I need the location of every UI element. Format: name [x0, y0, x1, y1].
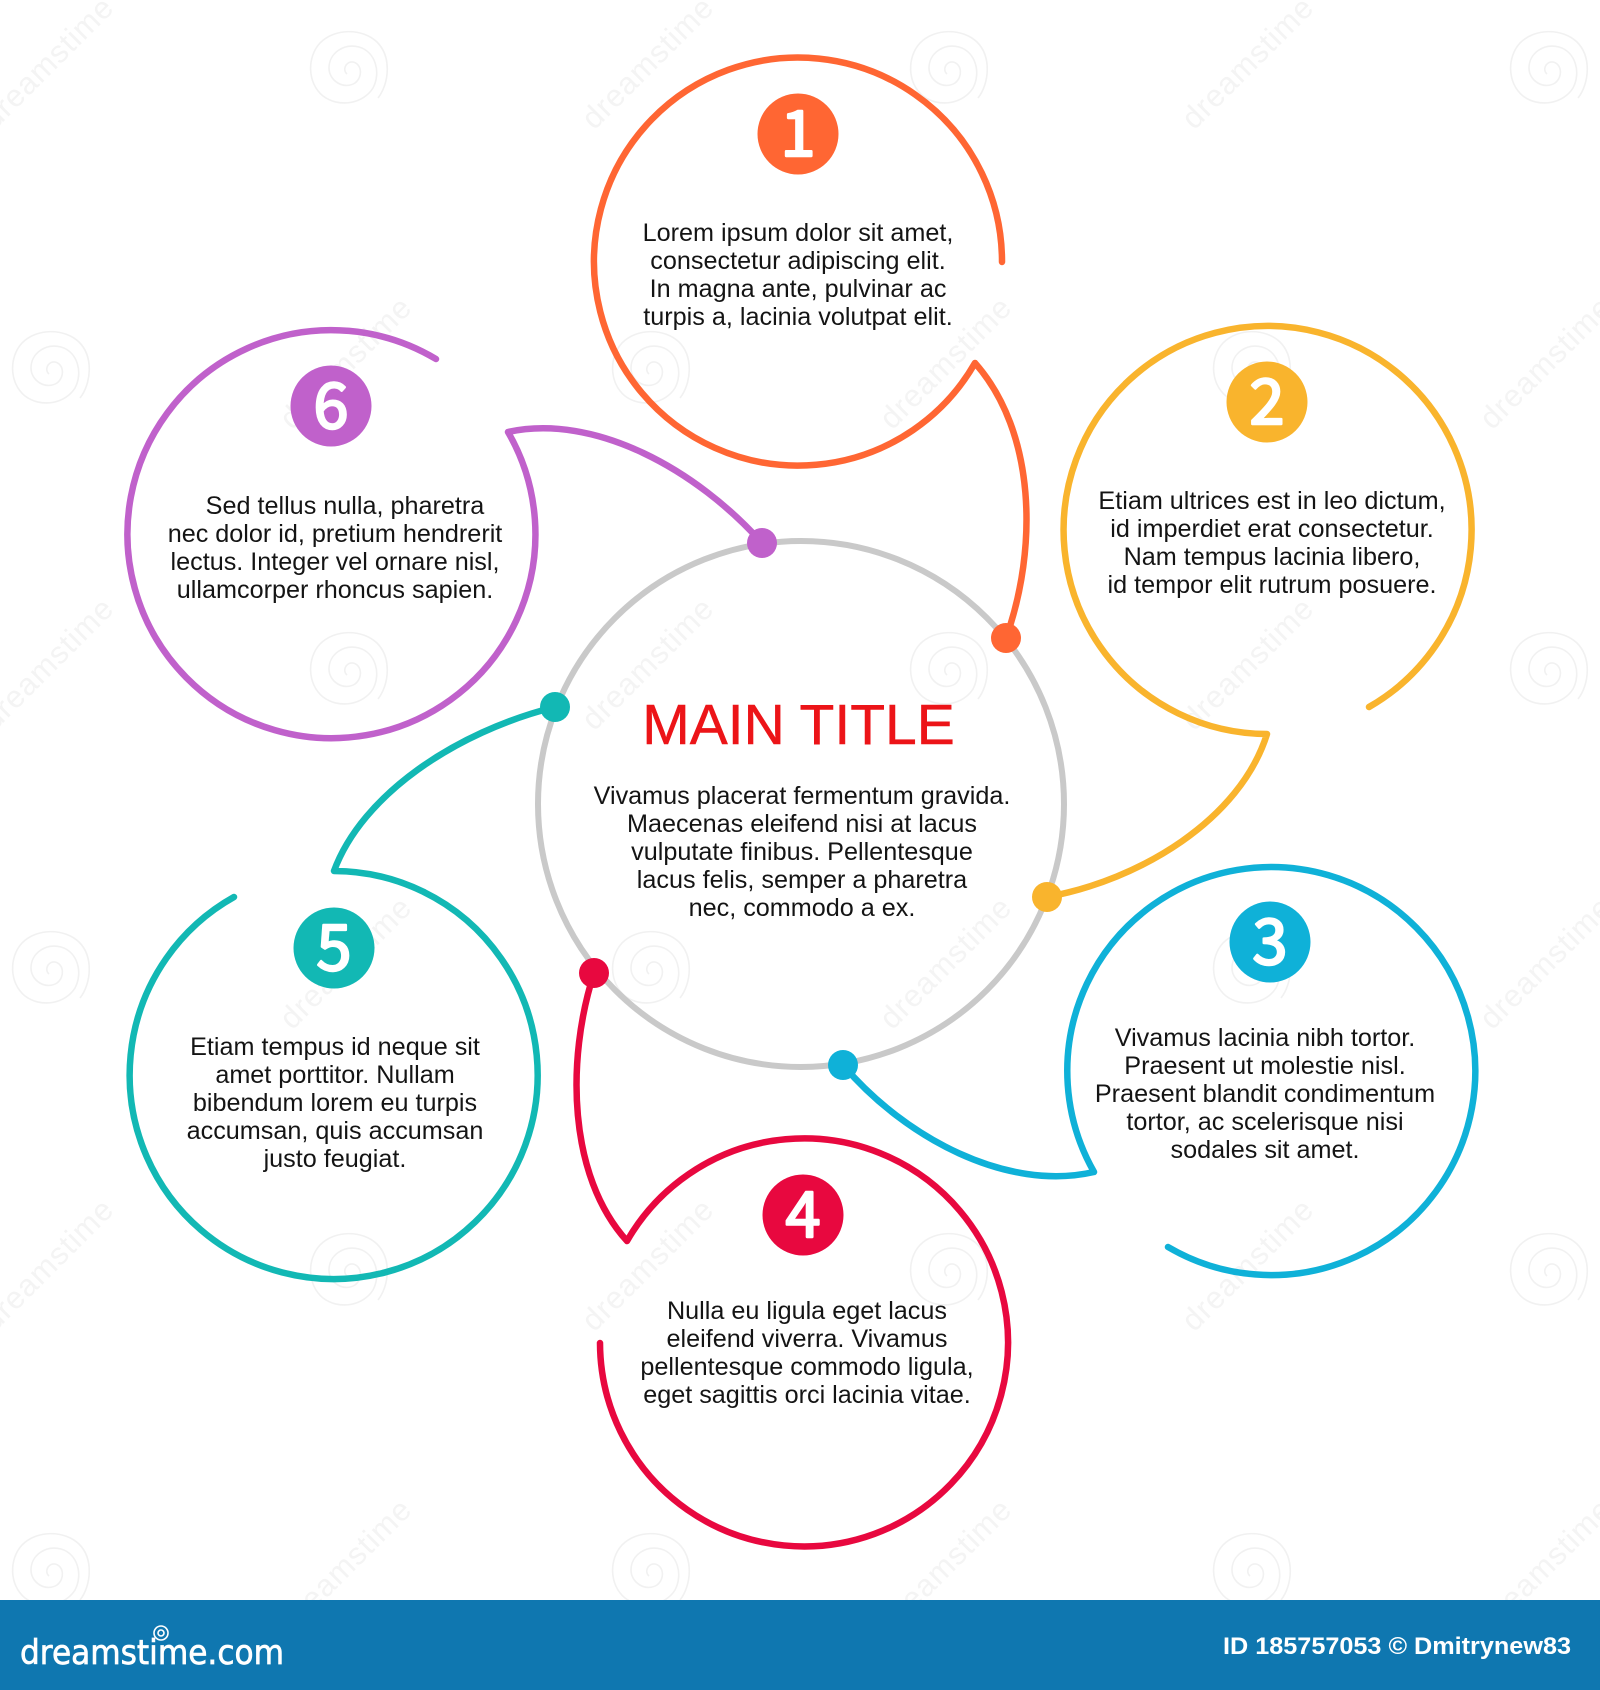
text 6: Sed tellus nulla, pharetra — [206, 492, 485, 520]
step 1 bubble — [594, 58, 1026, 653]
text 1: In magna ante, pulvinar ac — [650, 275, 946, 303]
text 2 — [1098, 487, 1446, 599]
text 1: Lorem ipsum dolor sit amet, — [643, 219, 953, 247]
text 6: nec dolor id, pretium hendrerit — [168, 520, 502, 548]
watermark pattern: dreamstime — [872, 289, 1019, 436]
text 6: ullamcorper rhoncus sapien. — [177, 576, 493, 604]
text 5: justo feugiat. — [263, 1145, 406, 1173]
text 2: Etiam ultrices est in leo dictum, — [1098, 487, 1446, 515]
step 3 bubble — [828, 867, 1475, 1275]
badge 6: 6 — [314, 356, 348, 447]
text 6: lectus. Integer vel ornare nisl, — [170, 548, 500, 576]
central circle panel — [538, 541, 1064, 1067]
badge 1 — [758, 84, 838, 175]
text 3: Praesent blandit condimentum — [1095, 1080, 1435, 1108]
text 3: Praesent ut molestie nisl. — [1124, 1052, 1406, 1080]
badge 6 — [290, 356, 372, 447]
central description: vulputate finibus. Pellentesque — [631, 838, 973, 866]
main title: MAIN TITLE — [642, 693, 955, 757]
badge 2: 2 — [1250, 352, 1284, 443]
step 6 bubble — [127, 330, 777, 738]
text 4: eget sagittis orci lacinia vitae. — [643, 1381, 971, 1409]
step 2 bubble — [1032, 326, 1472, 912]
watermark pattern: dreamstime — [1174, 590, 1321, 737]
step 5 bubble — [130, 692, 570, 1279]
badge 5: 5 — [317, 898, 351, 989]
badge 3 — [1230, 892, 1310, 983]
footer bar — [0, 1600, 1600, 1690]
watermark pattern: dreamstime — [1174, 1191, 1321, 1338]
outline 2 — [1047, 326, 1472, 897]
text 5: Etiam tempus id neque sit — [190, 1033, 480, 1061]
text 5: bibendum lorem eu turpis — [193, 1089, 477, 1117]
text 4: pellentesque commodo ligula, — [640, 1353, 974, 1381]
badge 2 — [1226, 352, 1308, 443]
text 5: amet porttitor. Nullam — [215, 1061, 455, 1089]
badge 5 — [294, 898, 374, 989]
badge 4 — [762, 1165, 844, 1256]
text 5 — [187, 1033, 483, 1173]
text 4 — [640, 1297, 974, 1409]
footer credit: ID 185757053 © Dmitrynew83 — [1223, 1633, 1571, 1660]
watermark pattern: dreamstime — [872, 1491, 1019, 1638]
step 4 bubble — [577, 958, 1008, 1546]
text 1 — [643, 219, 953, 331]
central description: Maecenas eleifend nisi at lacus — [627, 810, 977, 838]
badge 1: 1 — [781, 84, 815, 175]
watermark pattern: dreamstime — [272, 1491, 419, 1638]
text 3 — [1095, 1024, 1435, 1164]
outline 3 — [843, 867, 1475, 1275]
connector dot 6 — [747, 528, 777, 558]
text 3: Vivamus lacinia nibh tortor. — [1115, 1024, 1415, 1052]
text 2: id tempor elit rutrum posuere. — [1108, 571, 1436, 599]
watermark pattern: dreamstime — [872, 889, 1019, 1036]
watermark pattern: dreamstime — [272, 289, 419, 436]
connector dot 4 — [579, 958, 609, 988]
outline 6 — [127, 330, 762, 738]
central description — [594, 782, 1010, 922]
central description: lacus felis, semper a pharetra — [637, 866, 968, 894]
outline 1 — [594, 58, 1026, 638]
text 3: tortor, ac scelerisque nisi — [1126, 1108, 1404, 1136]
text 5: accumsan, quis accumsan — [187, 1117, 483, 1145]
text 2: Nam tempus lacinia libero, — [1124, 543, 1420, 571]
connector dot 5 — [540, 692, 570, 722]
text 2: id imperdiet erat consectetur. — [1110, 515, 1434, 543]
watermark pattern: dreamstime — [574, 590, 721, 737]
text 3: sodales sit amet. — [1170, 1136, 1360, 1164]
text 1: turpis a, lacinia volutpat elit. — [643, 303, 953, 331]
text 4: Nulla eu ligula eget lacus — [667, 1297, 947, 1325]
connector dot 2 — [1032, 882, 1062, 912]
outline 4 — [577, 973, 1008, 1546]
watermark pattern: dreamstime — [272, 889, 419, 1036]
central description: nec, commodo a ex. — [689, 894, 915, 922]
text 6 — [168, 492, 502, 604]
text 1: consectetur adipiscing elit. — [650, 247, 946, 275]
connector dot 3 — [828, 1050, 858, 1080]
watermark pattern: dreamstime — [574, 1191, 721, 1338]
central description: Vivamus placerat fermentum gravida. — [594, 782, 1010, 810]
outline 5 — [130, 707, 555, 1279]
badge 4: 4 — [786, 1165, 820, 1256]
footer logo: dreamstime.com — [20, 1633, 284, 1673]
connector dot 1 — [991, 623, 1021, 653]
badge 3: 3 — [1253, 892, 1287, 983]
text 4: eleifend viverra. Vivamus — [667, 1325, 947, 1353]
